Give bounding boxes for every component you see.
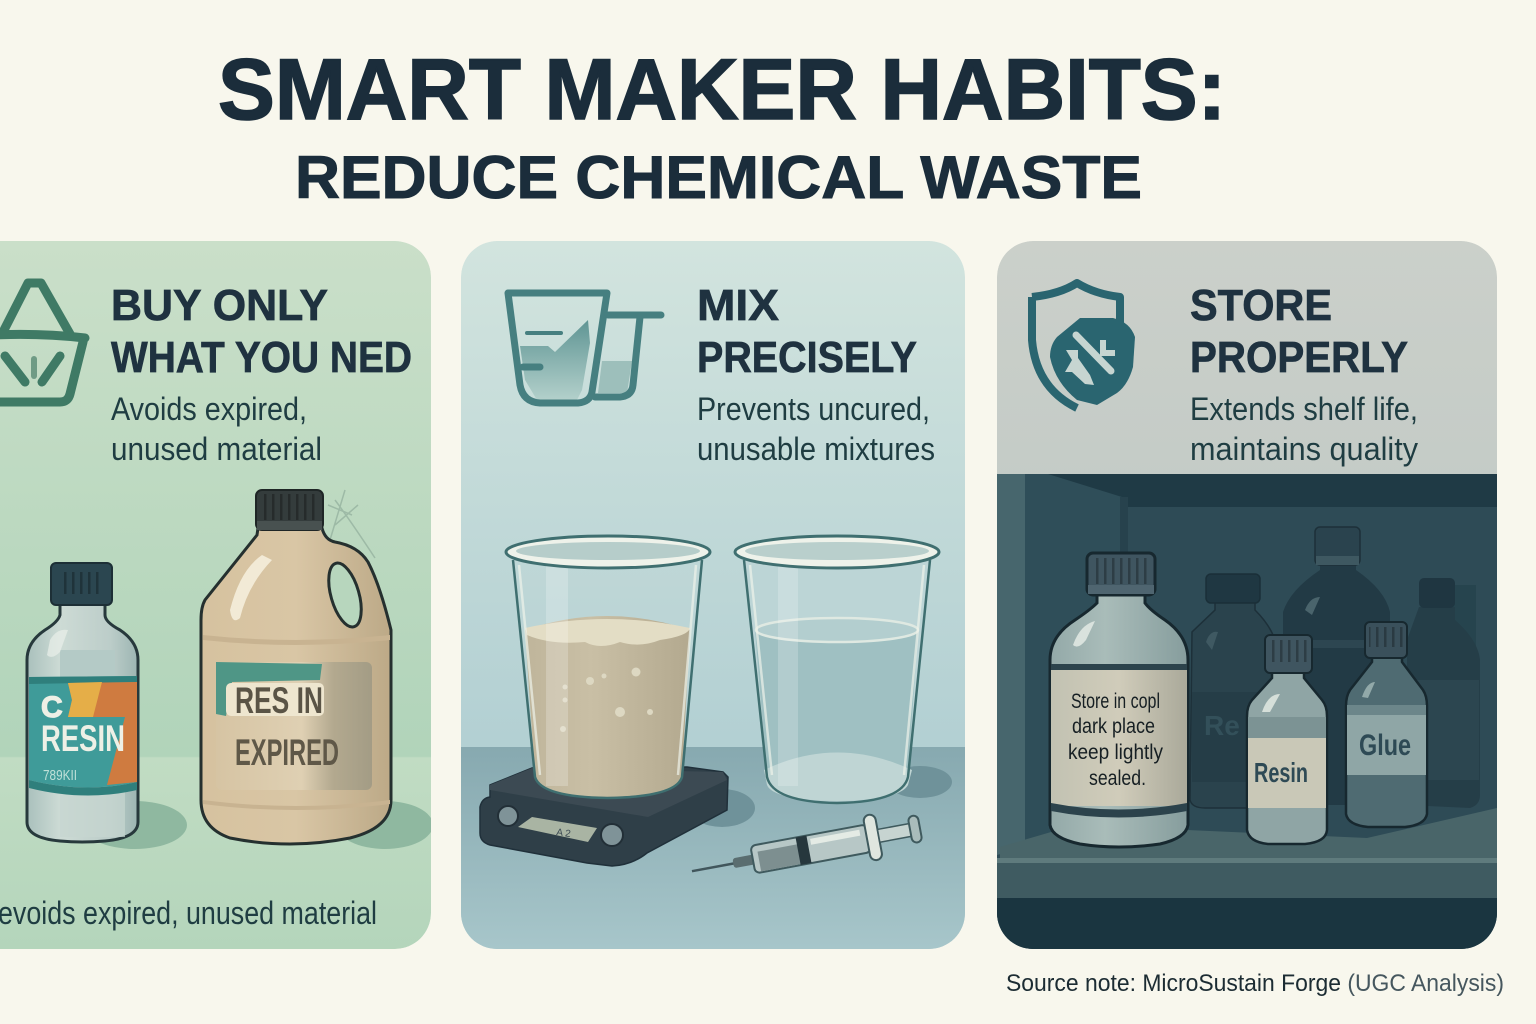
illustration: expired resin jug: EXPIRED (235, 732, 339, 773)
text: benefit (698, 396, 934, 460)
icon: measuring cups (508, 293, 661, 403)
bottle cap (1365, 622, 1407, 658)
illustration: rear bottle with faded label (1190, 574, 1275, 808)
illustration: large labelled bottle (1050, 553, 1188, 847)
bottle cap (1265, 635, 1312, 673)
illustration: small resin bottle (1247, 635, 1327, 844)
illustration: small resin bottle (27, 563, 187, 849)
table surface (461, 747, 965, 949)
text: benefit: maintains quality (1190, 431, 1418, 467)
text: benefit: Extends shelf life, (1190, 391, 1418, 427)
illustration: cup with cloudy mixture (506, 536, 710, 798)
panel: store properly (997, 241, 1497, 949)
heading: store properly: STORE (1190, 281, 1332, 330)
illustration: digital scale: A 2 (556, 827, 572, 840)
illustration: large labelled bottle: dark place (1072, 715, 1155, 738)
bottle cap (51, 563, 112, 605)
illustration: rear bottle with faded label: Re (1204, 710, 1240, 741)
heading: mix precisely: PRECISELY (697, 333, 917, 382)
illustration: syringe (692, 814, 923, 874)
illustration: expired resin jug: RES IN (235, 680, 323, 721)
heading: store properly: PROPERLY (1190, 333, 1408, 382)
illustration: large labelled bottle: sealed. (1089, 767, 1146, 790)
subtitle: REDUCE CHEMICAL WASTE (295, 144, 1142, 211)
jug cap (256, 490, 323, 530)
illustration: glue bottle (1346, 622, 1427, 827)
panel: mix precisely (461, 241, 965, 949)
bottle cap (1087, 553, 1155, 595)
text: bottom caption: evoids expired, unused material (0, 895, 377, 931)
heading: store properly (1190, 289, 1408, 373)
illustration: rear tall bottle (1283, 527, 1390, 805)
illustration: small resin bottle: RESIN (41, 718, 125, 759)
jug handle opening (327, 562, 363, 628)
illustration: dark storage shelf (997, 474, 1497, 949)
source note: Source note: MicroSustain Forge (UGC Analysis) (1006, 970, 1504, 997)
text: benefit: unused material (111, 431, 322, 467)
illustration: cup with clear liquid (735, 536, 952, 803)
illustration: small resin bottle: 789KII (43, 767, 77, 784)
illustration: small resin bottle: C (41, 691, 63, 724)
text: benefit: Prevents uncured, (697, 391, 930, 427)
text: benefit (1190, 391, 1418, 467)
text: benefit: Avoids expired, (111, 391, 307, 427)
icon: shopping basket (0, 283, 85, 402)
heading: buy only what you need (110, 289, 411, 373)
scale display (518, 817, 597, 842)
illustration: small resin bottle: Resin (1254, 757, 1308, 788)
illustration: large labelled bottle: Store in copl (1071, 690, 1160, 713)
illustration: glue bottle: Glue (1359, 729, 1411, 762)
illustration: large labelled bottle: keep lightly (1068, 741, 1163, 764)
heading: buy only what you need: BUY ONLY (111, 281, 328, 330)
title: SMART MAKER HABITS: (218, 42, 1226, 138)
panel: buy only what you need (0, 241, 433, 949)
text: benefit: unusable mixtures (697, 431, 935, 467)
heading: mix precisely: MIX (697, 281, 779, 330)
icon: shield (1032, 283, 1135, 408)
illustration: digital scale (480, 767, 755, 866)
jug label (256, 662, 372, 790)
heading: buy only what you need: WHAT YOU NED (111, 333, 412, 382)
heading: mix precisely (699, 290, 917, 373)
illustration: rear right bottle (1407, 578, 1480, 808)
illustration: expired resin jug (201, 490, 433, 849)
text: benefit (111, 396, 320, 460)
